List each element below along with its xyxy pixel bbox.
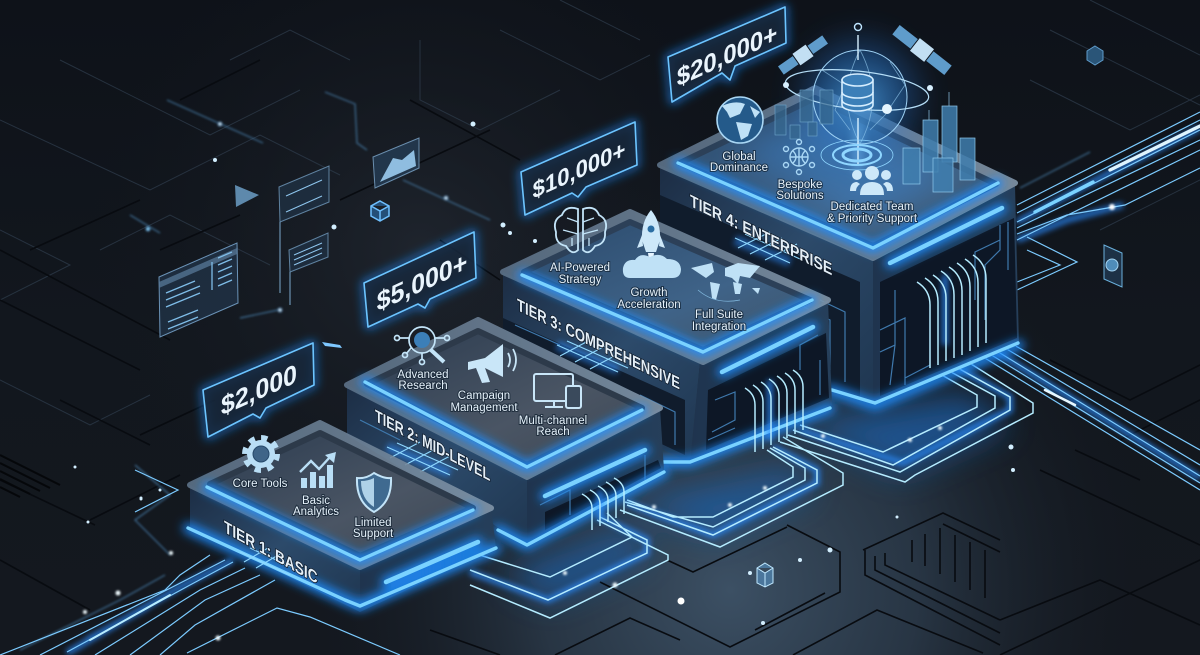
text: tier 2 features: Reach [536, 426, 570, 438]
bright dots [74, 122, 1015, 625]
text: tier 2 features: Research [398, 380, 448, 392]
icon: bar chart [300, 452, 336, 488]
text: tier 3 features [550, 262, 746, 333]
icon: gear [245, 438, 277, 470]
text: tier 1 features: Analytics [293, 506, 339, 518]
rings [821, 140, 893, 170]
top face [503, 212, 828, 362]
text: tier 3 features: Strategy [559, 274, 602, 286]
heading: tier 4: TIER 4: ENTERPRISE [690, 191, 832, 280]
text: tier 2 features: Multi-channel [519, 415, 587, 427]
icon: database [842, 74, 873, 111]
text: tier 3 features: AI-Powered [550, 262, 610, 274]
tier 3 wires [745, 370, 803, 452]
text: tier 2 features: Campaign [458, 390, 510, 402]
icon: research [394, 327, 450, 364]
icon: bespoke network [784, 140, 814, 174]
edge glow [678, 163, 1019, 405]
edge glow [188, 487, 496, 606]
city: left towers [775, 90, 833, 139]
stream: tier 2 loops [470, 513, 668, 618]
side faces [660, 165, 1019, 405]
tier 2 block [347, 232, 664, 545]
floor haze [505, 395, 1010, 600]
icon: world map [691, 263, 760, 301]
tier 3 block [503, 122, 832, 463]
text: tier 3 features: Integration [692, 321, 746, 333]
text: tier 3 features: Full Suite [695, 309, 743, 321]
heading: tier 1: TIER 1: BASIC [224, 516, 318, 588]
edge glow [365, 382, 664, 545]
icon: satellite right [891, 23, 953, 77]
tier 2 wires [582, 478, 624, 530]
tier 4 block [660, 88, 1019, 405]
text: tier 4 features: Dominance [710, 162, 768, 174]
top face [347, 320, 660, 477]
icon: team [850, 166, 893, 195]
text: tier 4 features: Bespoke [778, 179, 822, 191]
price: 20000: $20,000+ [677, 17, 777, 93]
icon: cloud [623, 255, 681, 278]
icon: globe [717, 97, 763, 143]
top face [190, 423, 491, 567]
top face [660, 88, 1015, 258]
tier 4 hologram [668, 7, 975, 280]
text: tier 1 features: Core Tools [233, 478, 288, 490]
panel: chart window [373, 138, 419, 188]
text: tier 4 features: & Priority Support [827, 213, 918, 225]
side faces [190, 485, 496, 612]
side faces [347, 385, 664, 545]
stream: tier 3 loops [620, 437, 843, 547]
price: 10000: $10,000+ [533, 136, 625, 205]
circuit traces [0, 0, 1200, 425]
panel: code window [159, 243, 238, 337]
stream: tier 4 main to lower right [975, 340, 1200, 490]
heading: tier 3: TIER 3: COMPREHENSIVE [517, 295, 680, 394]
background hologram panels and cubes [159, 46, 1122, 587]
icon: play triangle [235, 185, 259, 207]
stream: upper right [1017, 112, 1200, 290]
icon: devices [534, 374, 581, 408]
text: tier 1 features: Limited [354, 517, 392, 529]
text: tier 3 features: Growth [630, 287, 668, 299]
tier 1 block [188, 343, 496, 612]
icon: megaphone [468, 344, 516, 383]
side faces [503, 272, 832, 463]
text: tier 1 features: Support [353, 528, 394, 540]
text: tier 4 features: Global [722, 151, 756, 163]
text: tier 1 features [233, 478, 394, 540]
price: 5000: $5,000+ [377, 245, 467, 318]
price: 10000 [521, 122, 637, 215]
blurred traces with nodes [20, 92, 1090, 650]
text: tier 2 features: Advanced [397, 369, 449, 381]
price: 5000 [364, 232, 476, 327]
stream: tier 1 to lower left [0, 470, 400, 655]
icon: cube bottom [757, 563, 773, 587]
city: right towers [903, 92, 975, 192]
stream nodes [83, 426, 942, 640]
text: tier 2 features [397, 369, 587, 438]
heading: tier 2: TIER 2: MID-LEVEL [375, 405, 490, 485]
panel: right badge [1104, 245, 1122, 287]
tier 2 grid [387, 442, 458, 475]
panels: flags [279, 166, 329, 305]
price: 20000 [668, 7, 786, 102]
icon: brain [555, 208, 606, 252]
edge glow [522, 275, 830, 462]
tier 4 grid [735, 232, 800, 263]
text: tier 1 features: Basic [302, 495, 330, 507]
tier 3 grid [557, 340, 628, 372]
tier 1 grid [240, 548, 298, 575]
text: tier 4 features: Solutions [776, 190, 824, 202]
icon: satellite left [777, 34, 829, 76]
icon: rocket [637, 210, 665, 268]
tier 4 wires [917, 255, 986, 368]
text: tier 2 features: Management [450, 402, 518, 414]
text: tier 4 features [710, 151, 918, 225]
left horizontal hatch [0, 455, 60, 497]
icon: shield [357, 473, 391, 512]
text: tier 4 features: Dedicated Team [831, 201, 913, 213]
price: 2000 [203, 343, 314, 437]
icon: holographic globe [783, 24, 933, 170]
price: 2000: $2,000 [221, 357, 297, 422]
icon: cube top [1087, 46, 1103, 65]
icon: cube left [371, 201, 389, 221]
text: tier 3 features: Acceleration [617, 299, 681, 311]
stream: tier 4 loops [780, 357, 1033, 482]
